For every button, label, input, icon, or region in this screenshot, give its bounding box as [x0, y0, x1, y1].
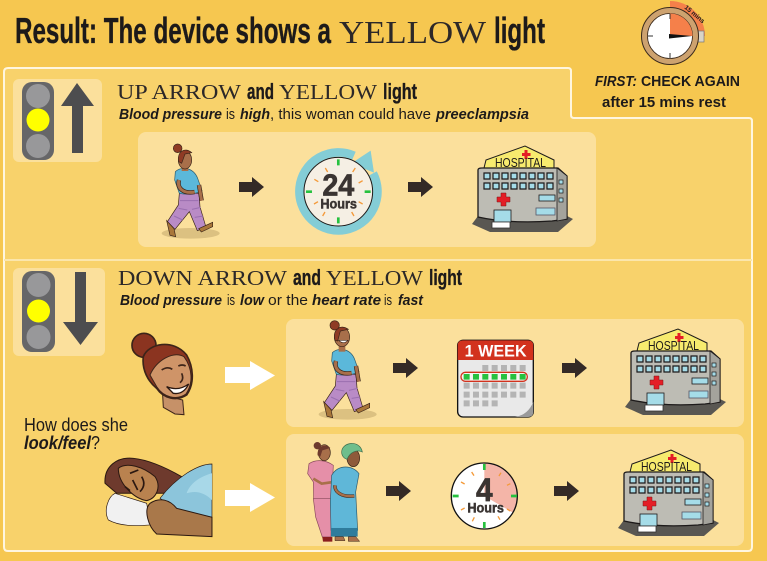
heading: up arrow and yellow light: YELLOW: [279, 80, 377, 104]
text: how does she look/feel: [24, 415, 128, 453]
icon: hospital: HOSPITAL: [495, 156, 546, 170]
heading: down arrow and yellow light: [118, 265, 462, 290]
text: how does she look/feel: look/feel: [24, 433, 92, 453]
text: low blood pressure: [120, 292, 424, 309]
icon: hospital: HOSPITAL: [648, 339, 699, 353]
icon: hospital: [472, 146, 573, 232]
arrow: white: [225, 361, 275, 390]
text: check again: [595, 73, 740, 111]
text: low blood pressure: or the: [268, 292, 308, 309]
icon: smiling woman's face: [132, 333, 192, 415]
heading: up arrow and yellow light: UP ARROW: [117, 80, 241, 104]
icon: 1 week calendar: 1 WEEK: [465, 342, 527, 361]
heading: down arrow and yellow light: YELLOW: [326, 266, 423, 290]
icon: 4 hour clock: [451, 463, 517, 529]
text: check again: FIRST:: [595, 73, 637, 90]
text: high blood pressure: is: [226, 106, 235, 123]
text: high blood pressure: preeclampsia: [435, 106, 529, 123]
icon: woman lying unwell: [105, 458, 212, 537]
title: Result: The device shows a: [15, 10, 332, 51]
arrow: [393, 358, 418, 378]
icon: 4 hour clock: 4: [476, 471, 493, 508]
arrow: [562, 358, 587, 378]
icon: hospital: HOSPITAL: [641, 460, 692, 474]
icon: hospital: [625, 329, 726, 415]
icon: 24 hour clock: [299, 151, 377, 230]
text: low blood pressure: is: [227, 292, 235, 309]
icon: hospital: [618, 450, 719, 536]
heading: up arrow and yellow light: light: [383, 79, 417, 104]
icon: traffic light with down arrow: [13, 268, 105, 356]
arrow: [554, 481, 579, 501]
text: low blood pressure: heart rate: [312, 292, 381, 309]
icon: 1 week calendar: [458, 340, 533, 417]
icon: 24 hour clock: 24: [322, 169, 354, 203]
text: high blood pressure: Blood pressure: [119, 106, 222, 123]
icon: nurse supporting pregnant woman: [308, 442, 362, 542]
text: low blood pressure: Blood pressure: [120, 292, 222, 309]
text: high blood pressure: high: [240, 106, 270, 123]
heading: down arrow and yellow light: DOWN ARROW: [118, 266, 287, 290]
heading: down arrow and yellow light: and: [293, 265, 321, 290]
icon: 15 minute clock: 15 mins: [683, 4, 706, 25]
arrow: white: [225, 483, 275, 512]
title: YELLOW: [339, 14, 487, 50]
icon: 24 hour clock: Hours: [320, 195, 357, 211]
panel: look unwell pathway: [286, 434, 744, 546]
panel: look well pathway: [286, 319, 744, 427]
text: low blood pressure: low: [240, 292, 265, 309]
arrow: [408, 177, 433, 197]
text: check again: CHECK AGAIN: [641, 73, 740, 90]
text: low blood pressure: fast: [398, 292, 424, 309]
arrow: [386, 481, 411, 501]
heading: up arrow and yellow light: [117, 79, 417, 104]
text: how does she look/feel: How does she: [24, 415, 128, 435]
text: how does she look/feel: ?: [91, 433, 100, 453]
text: high blood pressure: , this woman could have: [270, 106, 431, 123]
icon: 15 minute clock: [642, 1, 706, 64]
heading: down arrow and yellow light: light: [429, 265, 462, 290]
panel: up arrow pathway: [138, 132, 596, 247]
text: high blood pressure: [119, 106, 529, 123]
icon: traffic light with up arrow: [13, 79, 102, 162]
text: check again: after 15 mins rest: [602, 94, 726, 111]
heading: up arrow and yellow light: and: [247, 79, 274, 104]
title: light: [494, 10, 545, 51]
text: low blood pressure: is: [384, 292, 392, 309]
icon: walking pregnant woman smiling: [319, 321, 377, 420]
arrow: [239, 177, 264, 197]
icon: walking pregnant woman: [162, 144, 220, 239]
icon: 4 hour clock: Hours: [467, 500, 504, 516]
